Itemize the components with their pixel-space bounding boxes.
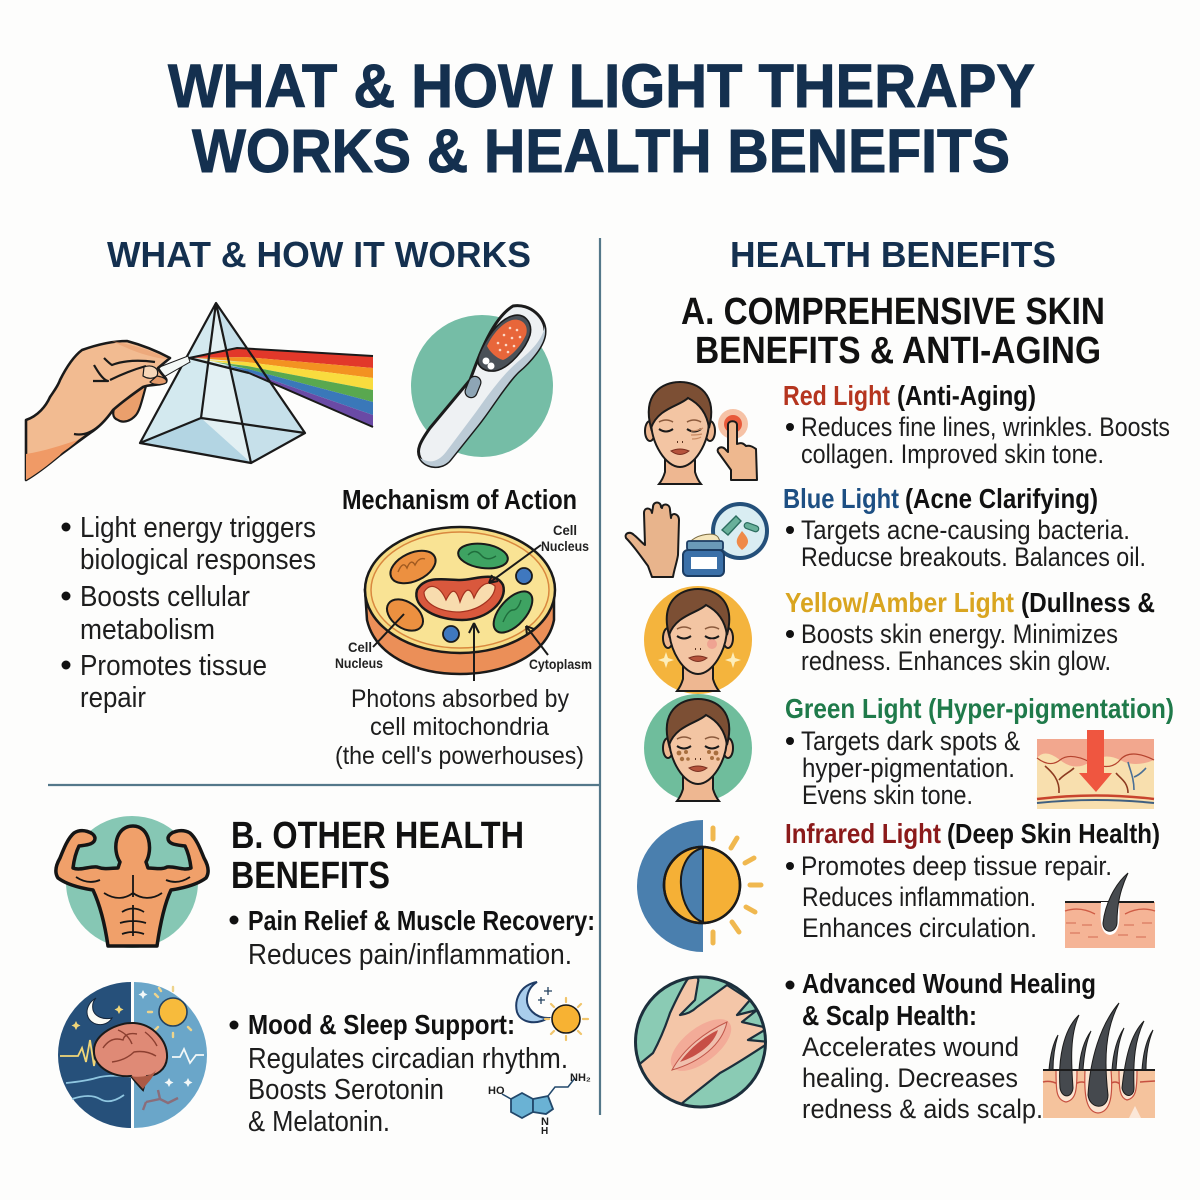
arrows xyxy=(373,545,548,681)
text block: green light: Evens skin tone. xyxy=(802,780,973,810)
rainbow beam xyxy=(189,348,373,427)
icon: handheld light therapy device xyxy=(411,306,553,467)
text block: infrared light: (Deep Skin Health) xyxy=(947,818,1160,849)
icon: skin layer with red arrow xyxy=(1037,730,1154,809)
text block: infrared light: Enhances circulation. xyxy=(802,913,1037,943)
icon: green light face xyxy=(644,694,752,802)
text block: yellow light: (Dullness & xyxy=(1021,587,1155,618)
text block: blue light xyxy=(783,483,1146,572)
text block: wound healing and scalp: Advanced Wound Healing xyxy=(802,968,1096,999)
text block: how it works bullets: Light energy triggers xyxy=(80,512,316,544)
text block: blue light: Reducse breakouts. Balances oil. xyxy=(801,542,1146,572)
text block: wound healing and scalp: redness & aids scalp. xyxy=(802,1094,1043,1124)
title: WHAT & HOW LIGHT THERAPY xyxy=(168,52,1035,120)
text block: infrared light xyxy=(785,818,1160,943)
icon: wound on hand xyxy=(630,976,770,1115)
icon: scalp with hair follicles xyxy=(1043,1003,1155,1118)
text block: how it works bullets: Promotes tissue xyxy=(80,650,267,682)
caption: photons absorbed: (the cell's powerhouses) xyxy=(335,742,584,770)
text block: how it works bullets xyxy=(62,512,316,714)
text block: blue light: Blue Light xyxy=(783,483,899,514)
title xyxy=(168,52,1035,185)
text block: yellow light: Boosts skin energy. Minimizes xyxy=(801,619,1118,649)
text block: pain relief xyxy=(230,905,595,971)
text block: how it works bullets: metabolism xyxy=(80,614,215,646)
chart: cell diagram: Nucleus xyxy=(335,655,383,671)
text block: yellow light: redness. Enhances skin glow. xyxy=(801,646,1111,676)
text block: red light: (Anti-Aging) xyxy=(897,380,1036,411)
heading: health benefits: HEALTH BENEFITS xyxy=(730,234,1056,275)
panel: other health benefits xyxy=(56,815,595,1138)
chart: cell diagram xyxy=(335,522,592,681)
icon: serotonin molecule: HO xyxy=(488,1085,505,1097)
icon: yellow amber face xyxy=(644,586,752,694)
text block: wound healing and scalp: Accelerates wound xyxy=(802,1032,1019,1062)
text block: wound healing and scalp: & Scalp Health: xyxy=(802,1000,977,1031)
text block: red light: Red Light xyxy=(783,380,890,411)
icon: muscular torso xyxy=(56,816,208,948)
text block: red light xyxy=(783,380,1170,469)
text block: pain relief: Pain Relief & Muscle Recovery: xyxy=(248,905,595,936)
icon: serotonin molecule: N xyxy=(541,1116,549,1128)
text block: how it works bullets: biological responses xyxy=(80,544,316,576)
icon: red light face and finger xyxy=(645,382,757,484)
text block: yellow light xyxy=(785,587,1155,676)
text block: infrared light: Reduces inflammation. xyxy=(802,882,1036,912)
text block: blue light: Targets acne-causing bacteria. xyxy=(801,515,1130,545)
caption: photons absorbed xyxy=(335,685,584,770)
text block: wound healing and scalp xyxy=(786,968,1096,1124)
text block: infrared light: Infrared Light xyxy=(785,818,941,849)
heading: comprehensive skin benefits xyxy=(681,291,1105,372)
text block: mood and sleep: & Melatonin. xyxy=(248,1106,390,1138)
icon: brain day and night xyxy=(58,982,207,1128)
chart: cell diagram: Nucleus xyxy=(541,538,589,554)
icon: skin cross-section with hair xyxy=(1065,873,1155,948)
text block: wound healing and scalp: healing. Decreases xyxy=(802,1063,1018,1093)
icon: serotonin molecule: NH₂ xyxy=(570,1072,591,1084)
heading: other health benefits xyxy=(231,815,524,897)
text block: infrared light: Promotes deep tissue repair. xyxy=(801,851,1112,881)
text block: blue light: (Acne Clarifying) xyxy=(905,483,1098,514)
text block: mood and sleep xyxy=(230,1009,568,1138)
icon: blue light hand, jar and bacteria xyxy=(626,502,767,577)
text block: how it works bullets: Boosts cellular xyxy=(80,581,250,613)
text block: mood and sleep: Mood & Sleep Support: xyxy=(248,1009,515,1040)
text block: pain relief: Reduces pain/inflammation. xyxy=(248,939,572,971)
text block: yellow light: Yellow/Amber Light xyxy=(785,587,1014,618)
organelle: mitochondrion xyxy=(416,577,504,620)
panel: skin benefits xyxy=(626,291,1174,1124)
heading: what and how it works: WHAT & HOW IT WORKS xyxy=(107,234,531,275)
caption: photons absorbed: cell mitochondria xyxy=(370,713,549,741)
caption: photons absorbed: Photons absorbed by xyxy=(351,685,569,713)
chart: cell diagram: Cell xyxy=(553,522,577,538)
text block: red light: collagen. Improved skin tone. xyxy=(801,439,1104,469)
hand xyxy=(26,341,170,480)
heading: comprehensive skin benefits: A. COMPREHENSIVE SKIN xyxy=(681,291,1105,333)
heading: mechanism of action: Mechanism of Action xyxy=(342,484,577,515)
title: WORKS & HEALTH BENEFITS xyxy=(192,117,1010,185)
text block: green light: Targets dark spots & xyxy=(801,726,1020,756)
icon: hand holding prism with rainbow xyxy=(26,303,373,480)
icon: serotonin molecule xyxy=(488,1072,591,1137)
icon: infrared moon and sun xyxy=(637,820,761,952)
text block: how it works bullets: repair xyxy=(80,682,146,714)
heading: other health benefits: BENEFITS xyxy=(231,855,390,897)
heading: comprehensive skin benefits: BENEFITS & ANTI-AGING xyxy=(695,330,1101,372)
icon: serotonin molecule: H xyxy=(541,1126,548,1137)
chart: cell diagram: Cell xyxy=(348,639,372,655)
icon: moon and sun xyxy=(516,982,588,1040)
text block: green light xyxy=(785,693,1174,810)
text block: mood and sleep: Boosts Serotonin xyxy=(248,1074,444,1106)
text block: green light: hyper-pigmentation. xyxy=(802,753,1015,783)
text block: mood and sleep: Regulates circadian rhythm. xyxy=(248,1043,568,1075)
heading: other health benefits: B. OTHER HEALTH xyxy=(231,815,524,857)
chart: cell diagram: Cytoplasm xyxy=(529,656,592,672)
